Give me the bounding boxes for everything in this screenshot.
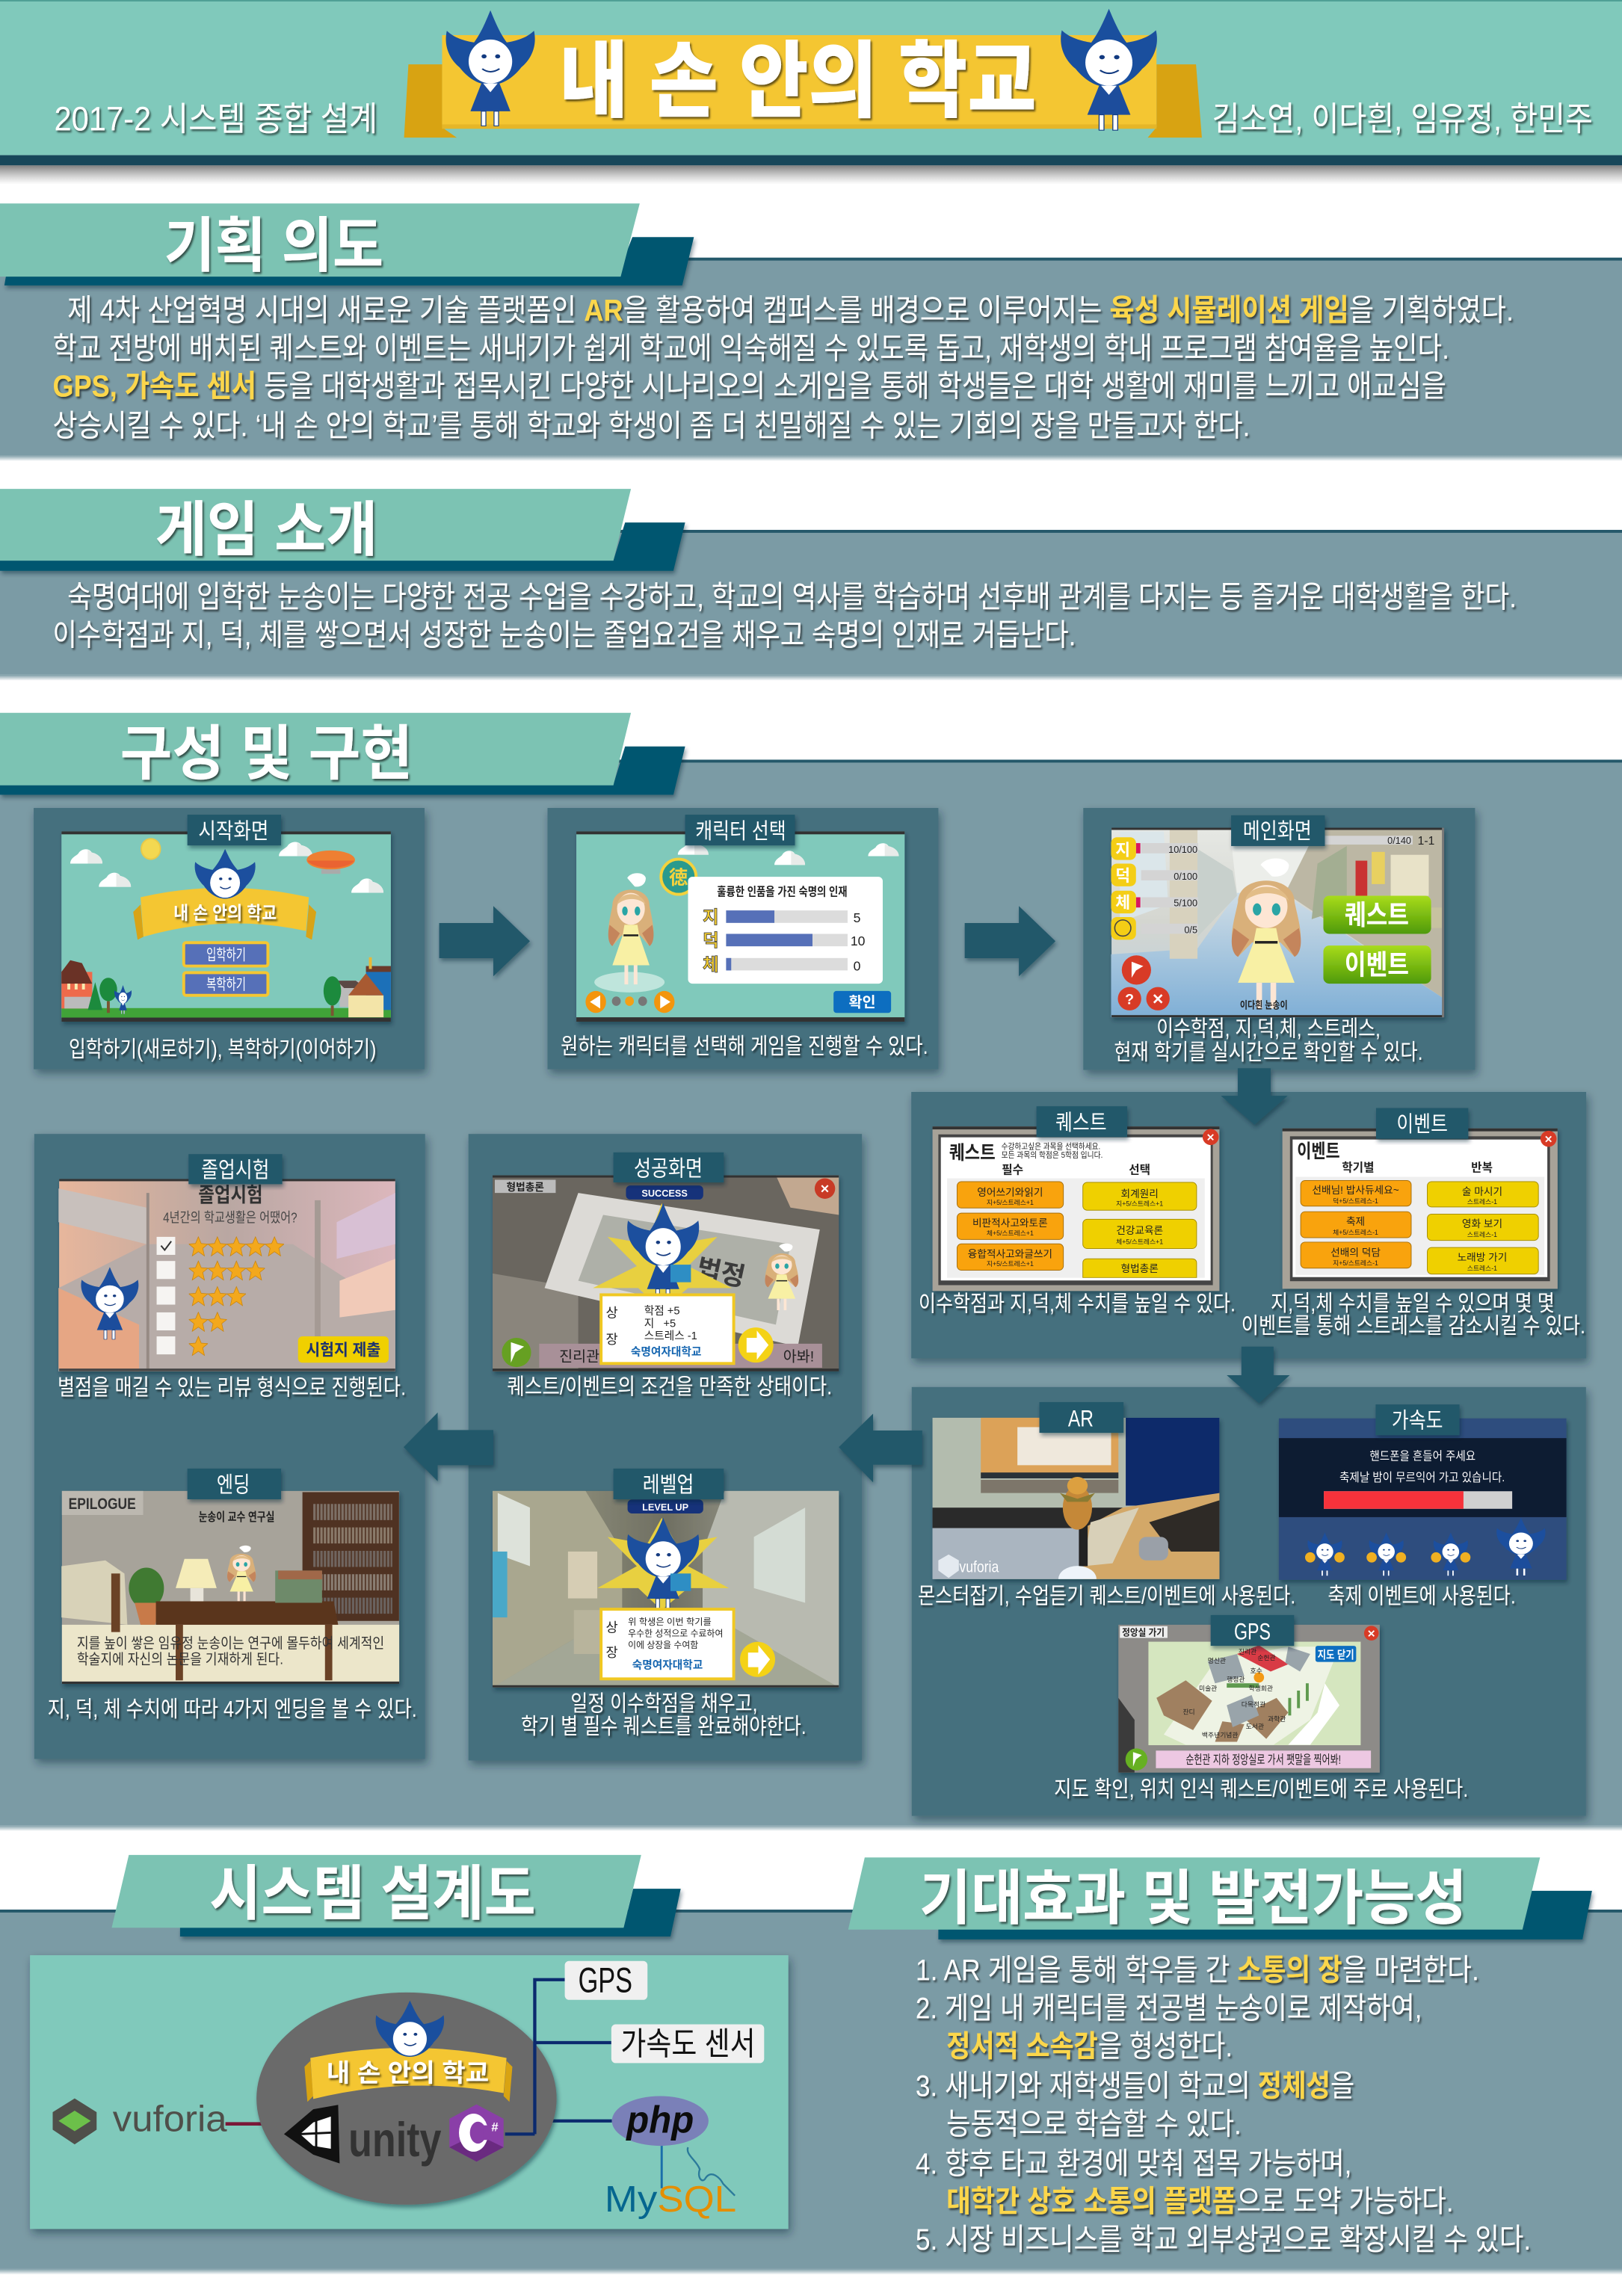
heading: game introduction: 게임 소개: [155, 481, 377, 568]
caption: main screen: 현재 학기를 실시간으로 확인할 수 있다.: [1114, 1040, 1423, 1065]
screenshot: main screen: 덕: [1115, 867, 1130, 885]
screenshot: event: 노래방 가기: [1458, 1252, 1507, 1263]
screenshot: quest: 영어쓰기와읽기: [977, 1187, 1043, 1198]
screenshot: ending: 눈송이 교수 연구실: [199, 1510, 274, 1524]
list: expected effects: [916, 1954, 1531, 2256]
screenshot: success: 장: [606, 1332, 618, 1347]
screenshot: character select: 0: [854, 958, 861, 973]
screenshot: event: ✕: [1544, 1134, 1552, 1145]
screenshot: success: ✕: [820, 1183, 830, 1196]
heading: composition and implementation: [0, 706, 685, 794]
caption: ending: 지, 덕, 체 수치에 따라 4가지 엔딩을 볼 수 있다.: [48, 1697, 417, 1722]
list: expected effects: 2. 게임 내 캐릭터를 전공별 눈송이로 제작하여,: [916, 1992, 1422, 2025]
screenshot: acceleration: [1279, 1419, 1567, 1580]
screenshot: GPS map: 지도 닫기: [1318, 1649, 1354, 1661]
label: GPS: [1211, 1615, 1294, 1646]
label: AR: AR: [1068, 1405, 1094, 1431]
screenshot: main screen: 퀘스트: [1345, 892, 1409, 933]
label: acceleration: [1375, 1404, 1460, 1435]
heading: planning intent: [0, 197, 694, 286]
screenshot: success: [493, 1176, 839, 1371]
screenshot: main screen: 5/100: [1174, 897, 1197, 908]
card: graduation and ending: [34, 1134, 425, 1759]
screenshot: start screen: 내 손 안의 학교: [173, 899, 277, 925]
screenshot: character select: 확인: [849, 994, 876, 1010]
panel: game introduction: [0, 530, 1622, 681]
screenshot: success: 진리관: [559, 1348, 599, 1365]
label: main screen: 메인화면: [1243, 819, 1312, 844]
caption: quest: 이수학점과 지,덕,체 수치를 높일 수 있다.: [919, 1292, 1236, 1317]
screenshot: event: 이벤트: [1297, 1136, 1340, 1164]
card: start screen: [34, 808, 425, 1070]
intent text: GPS, 가속도 센서 등을 대학생활과 접목시킨 다양한 시나리오의 소게임을 통해 학생들은 대학 생활에 재미를 느끼고 애교심을: [53, 369, 1446, 404]
screenshot: level up: [493, 1491, 839, 1688]
panel: system design and outlook: [0, 1910, 1622, 2274]
caption: main screen: 이수학점, 지,덕,체, 스트레스,: [1156, 1016, 1381, 1042]
screenshot: success: 상: [606, 1306, 618, 1321]
screenshot: AR: [933, 1418, 1219, 1579]
logo: C#: [449, 2105, 504, 2161]
screenshot: ending: 학술지에 자신의 논문을 기재하게 된다.: [77, 1652, 283, 1668]
logo: vuforia: vuforia: [113, 2099, 227, 2139]
connector lines: [226, 1980, 662, 2188]
logo: unity: [284, 2105, 442, 2167]
screenshot: level up: 위 학생은 이번 학기를: [628, 1617, 712, 1627]
logo: vuforia: [53, 2099, 227, 2144]
screenshot: level up: LEVEL UP: [642, 1502, 689, 1513]
screenshot: ending: [61, 1491, 399, 1684]
chart: system diagram: [30, 1955, 789, 2229]
caption: acceleration: 축제 이벤트에 사용된다.: [1327, 1584, 1516, 1608]
icon: mascot left: [446, 10, 535, 126]
screenshot: GPS map: 순헌관 지하 정앙실로 가서 팻말을 찍어봐!: [1185, 1753, 1341, 1767]
screenshot: character select: 체: [703, 954, 719, 974]
caption: success: 퀘스트/이벤트의 조건을 만족한 상태이다.: [507, 1374, 832, 1399]
intent text: 상승시킬 수 있다. ‘내 손 안의 학교’를 통해 학교와 학생이 좀 더 친밀해질 수 있는 기회의 장을 만들고자 한다.: [53, 409, 1251, 443]
screenshot: event: 지+5/스트레스-1: [1333, 1259, 1378, 1267]
screenshot: event: [1283, 1129, 1558, 1289]
arrow: sensors to success: [839, 1413, 922, 1482]
screenshot: AR: vuforia: [959, 1558, 999, 1576]
heading: system design: 시스템 설계도: [209, 1846, 536, 1933]
screenshot: main screen: 10/100: [1168, 844, 1197, 855]
screenshot: event: 선배님! 밥사듀세요~: [1312, 1185, 1399, 1196]
screenshot: main screen: 이벤트: [1345, 942, 1409, 982]
screenshot: acceleration: 축제날 밤이 무르익어 가고 있습니다.: [1339, 1471, 1505, 1484]
card: main screen: [1083, 808, 1475, 1070]
heading: game introduction: [0, 481, 685, 571]
list: expected effects: 3. 새내기와 재학생들이 학교의 정체성을: [916, 2069, 1354, 2102]
screenshot: quest: 필수: [1002, 1164, 1023, 1177]
screenshot: GPS map: 정앙실 가기: [1122, 1627, 1165, 1638]
caption: start screen: 입학하기(새로하기), 복학하기(이어하기): [69, 1037, 376, 1062]
screenshot: character select: 徳: [669, 862, 688, 890]
screenshot: character select: 5: [854, 910, 861, 925]
screenshot: GPS map: 진리관: [1239, 1648, 1256, 1655]
caption: graduation exam: 별점을 매길 수 있는 리뷰 형식으로 진행된다.: [58, 1375, 406, 1400]
arrow: quest and event to sensors: [1227, 1347, 1289, 1404]
screenshot: GPS map: [1118, 1625, 1380, 1773]
screenshot: GPS map: 다목적관: [1242, 1700, 1265, 1709]
screenshot: ending: EPILOGUE: [69, 1495, 136, 1513]
icon: mascot right: [1061, 9, 1157, 130]
screenshot: start screen: 입학하기: [206, 947, 246, 964]
screenshot: quest: 수강하고싶은 과목을 선택하세요.: [1002, 1141, 1100, 1151]
title banner: [404, 14, 1202, 138]
screenshot: success: 법정: [694, 1253, 747, 1292]
card: sensors: [912, 1387, 1586, 1816]
label: AR: [1040, 1402, 1123, 1433]
screenshot: quest: 융합적사고와글쓰기: [968, 1248, 1052, 1259]
screenshot: success: SUCCESS: [641, 1188, 688, 1199]
logo: php: [612, 2096, 709, 2146]
screenshot: quest: 지+5/스트레스+1: [987, 1199, 1034, 1206]
card: character select: [547, 808, 938, 1070]
screenshot: event: 스트레스-1: [1467, 1198, 1497, 1206]
screenshot: character select: [576, 831, 904, 1022]
screenshot: event: 체+5/스트레스-1: [1333, 1229, 1378, 1236]
node: GPS: GPS: [579, 1960, 632, 1999]
screenshot: level up: 장: [606, 1645, 618, 1660]
screenshot: event: 축제: [1346, 1216, 1365, 1227]
screenshot: main screen: 체: [1115, 894, 1130, 912]
screenshot: quest: 체+5/스트레스+1: [987, 1229, 1034, 1237]
label: start screen: [188, 815, 281, 845]
heading: planning intent: 기획 의도: [164, 197, 383, 284]
caption: GPS: 지도 확인, 위치 인식 퀘스트/이벤트에 주로 사용된다.: [1054, 1777, 1468, 1802]
screenshot: event: 영화 보기: [1462, 1218, 1502, 1229]
screenshot: GPS map: 과학관: [1268, 1715, 1286, 1723]
screenshot: main screen: 지: [1115, 842, 1130, 860]
screenshot: success: 형법총론: [507, 1182, 544, 1193]
tech stack ellipse: 내 손 안의 학교: [327, 2052, 489, 2089]
screenshot: quest: 비판적사고와토론: [972, 1218, 1048, 1229]
header band: [0, 0, 1622, 185]
label: success: 성공화면: [634, 1157, 703, 1182]
screenshot: event: 술 마시기: [1462, 1186, 1502, 1197]
screenshot: start screen: 복학하기: [206, 976, 246, 993]
screenshot: GPS map: 미술관: [1199, 1685, 1217, 1692]
label: main screen: [1231, 815, 1325, 846]
logo: MySQL: MySQL: [605, 2179, 736, 2220]
screenshot: level up: 우수한 성적으로 수료하여: [628, 1629, 723, 1639]
screenshot: GPS map: ✕: [1367, 1629, 1375, 1640]
label: level up: 레벨업: [643, 1473, 694, 1498]
screenshot: GPS map: 명신관: [1208, 1657, 1226, 1664]
screenshot: success: 지 +5: [644, 1317, 676, 1330]
arrow: start to character: [440, 906, 530, 976]
screenshot: quest: [933, 1126, 1219, 1291]
screenshot: quest: 지+5/스트레스+1: [1116, 1200, 1163, 1208]
screenshot: character select: 10: [851, 933, 866, 948]
label: GPS: GPS: [1234, 1618, 1271, 1644]
list: expected effects: 1. AR 게임을 통해 학우들 간 소통의 장을 마련한다.: [916, 1954, 1479, 1987]
list: expected effects: 5. 시장 비즈니스를 학교 외부상권으로 확장시킬 수 있다.: [916, 2223, 1531, 2256]
label: quest: 퀘스트: [1055, 1111, 1107, 1135]
screenshot: character select: 지: [703, 907, 719, 927]
screenshot: quest: 퀘스트: [949, 1138, 996, 1165]
label: character select: [685, 815, 795, 845]
panel: composition and implementation: [0, 759, 1622, 1831]
screenshot: level up: 상: [606, 1620, 618, 1635]
logo: C#: #: [491, 2120, 499, 2134]
intro text: 이수학점과 지, 덕, 체를 쌓으면서 성장한 눈송이는 졸업요건을 채우고 숙명의 인재로 거듭난다.: [53, 618, 1076, 652]
caption: AR: 몬스터잡기, 수업듣기 퀘스트/이벤트에 사용된다.: [918, 1584, 1295, 1608]
screenshot: GPS map: 행정관: [1227, 1675, 1245, 1683]
screenshot: success: 스트레스 -1: [644, 1330, 697, 1342]
screenshot: GPS map: 도서관: [1246, 1723, 1264, 1730]
label: start screen: 시작화면: [198, 819, 268, 844]
intent text: [53, 293, 1514, 443]
screenshot: event: 덕+5/스트레스-1: [1333, 1197, 1378, 1205]
card: success and level up: [469, 1134, 862, 1760]
screenshot: character select: 덕: [703, 931, 719, 950]
heading: composition and implementation: 구성 및 구현: [120, 706, 413, 792]
arrow: main to quest and event: [1221, 1068, 1288, 1125]
caption: main screen: [1114, 1016, 1423, 1065]
screenshot: event: 스트레스-1: [1467, 1265, 1497, 1272]
caption: event: [1242, 1292, 1585, 1339]
caption: level up: 일정 이수학점을 채우고,: [570, 1691, 758, 1716]
list: expected effects: 4. 향후 타교 환경에 맞춰 접목 가능하며,: [916, 2147, 1351, 2180]
screenshot: main screen: 0/140: [1387, 835, 1411, 846]
screenshot: quest: 체+5/스트레스+1: [1116, 1238, 1163, 1246]
title text: 내 손 안의 학교: [559, 14, 1037, 135]
label: event: [1376, 1108, 1468, 1139]
label: ending: [188, 1469, 281, 1499]
screenshot: level up: 숙명여자대학교: [632, 1659, 703, 1672]
screenshot: main screen: ✕: [1152, 991, 1164, 1007]
screenshot: GPS map: 순헌관: [1257, 1654, 1276, 1661]
caption: event: 지,덕,체 수치를 높일 수 있으며 몇 몇: [1271, 1292, 1555, 1316]
screenshot: quest: 지+5/스트레스+1: [987, 1260, 1034, 1268]
screenshot: quest: 건강교육론: [1116, 1225, 1163, 1236]
screenshot: event: 스트레스-1: [1467, 1231, 1497, 1238]
screenshot: quest: 선택: [1129, 1164, 1150, 1177]
tech stack ellipse: [256, 1993, 557, 2205]
node: acceleration sensor: 가속도 센서: [620, 2027, 756, 2063]
screenshot: ending: 지를 높이 쌓은 임유정 눈송이는 연구에 몰두하여 세계적인: [77, 1635, 384, 1652]
screenshot: graduation exam: 졸업시험: [198, 1183, 263, 1206]
label: acceleration: 가속도: [1392, 1408, 1443, 1433]
screenshot: quest: ✕: [1206, 1132, 1215, 1144]
screenshot: acceleration: 핸드폰을 흔들어 주세요: [1369, 1450, 1475, 1463]
intro text: [53, 580, 1517, 652]
screenshot: success: 아봐!: [783, 1348, 814, 1365]
heading: expected effects: 기대효과 및 발전가능성: [919, 1851, 1467, 1937]
label: success: [614, 1152, 724, 1182]
heading: system design: [111, 1846, 681, 1937]
label: event: 이벤트: [1396, 1112, 1448, 1137]
screenshot: character select: 훌륭한 인품을 가진 숙명의 인재: [717, 886, 848, 899]
logo: unity: unity: [348, 2113, 442, 2167]
caption: level up: [521, 1691, 807, 1739]
label: character select: 캐릭터 선택: [695, 819, 786, 844]
caption: character select: 원하는 캐릭터를 선택해 게임을 진행할 수 있다.: [561, 1034, 928, 1059]
caption: level up: 학기 별 필수 퀘스트를 완료해야한다.: [521, 1714, 807, 1739]
logo: MySQL: [605, 2147, 736, 2220]
screenshot: quest: 모든 과목의 학점은 5학점 입니다.: [1002, 1150, 1103, 1160]
screenshot: start screen: [61, 831, 391, 1022]
screenshot: GPS map: 잔디: [1182, 1708, 1195, 1715]
header left text: course name: 2017-2 시스템 종합 설계: [54, 99, 377, 138]
screenshot: main screen: [1111, 827, 1444, 1017]
label: graduation exam: 졸업시험: [201, 1158, 269, 1183]
list: expected effects: 능동적으로 학습할 수 있다.: [946, 2107, 1242, 2141]
screenshot: level up: 이에 상장을 수여함: [628, 1641, 698, 1650]
panel: planning intent: [0, 258, 1622, 461]
intent text: 제 4차 산업혁명 시대의 새로운 기술 플랫폼인 AR을 활용하여 캠퍼스를 배경으로 이루어지는 육성 시뮬레이션 게임을 기획하였다.: [67, 293, 1514, 327]
screenshot: GPS map: 백주년기념관: [1202, 1732, 1238, 1739]
screenshot: main screen: 1-1: [1418, 835, 1434, 848]
screenshot: quest: 회계원리: [1120, 1188, 1159, 1200]
screenshot: success: 숙명여자대학교: [631, 1346, 701, 1359]
card: quest and event: [911, 1092, 1586, 1358]
label: ending: 엔딩: [217, 1473, 250, 1498]
screenshot: main screen: 0/5: [1184, 925, 1197, 936]
screenshot: graduation exam: 4년간의 학교생활은 어땠어?: [163, 1209, 297, 1225]
arrow: character to main: [965, 906, 1055, 976]
screenshot: main screen: 0/100: [1174, 871, 1197, 882]
screenshot: event: 학기별: [1342, 1161, 1374, 1175]
screenshot: graduation exam: [58, 1179, 395, 1371]
arrow: success to graduation: [404, 1413, 493, 1481]
screenshot: success: 학점 +5: [644, 1305, 680, 1318]
screenshot: main screen: 이다흰 눈송이: [1240, 999, 1288, 1010]
screenshot: event: 반복: [1471, 1161, 1493, 1175]
list: expected effects: 대학간 상호 소통의 플랫폼으로 도약 가능하다.: [946, 2185, 1454, 2218]
screenshot: main screen: ?: [1125, 991, 1134, 1007]
screenshot: graduation exam: 시험지 제출: [306, 1342, 380, 1360]
screenshot: event: 선배의 덕담: [1330, 1247, 1381, 1258]
logo: php: php: [625, 2098, 694, 2141]
label: level up: [614, 1469, 724, 1499]
screenshot: GPS map: 호수: [1251, 1667, 1262, 1674]
label: quest: [1037, 1106, 1127, 1137]
screenshot: quest: 형법총론: [1120, 1263, 1159, 1274]
screenshot: GPS map: 학생회관: [1249, 1685, 1273, 1692]
list: expected effects: 정서적 소속감을 형성한다.: [946, 2030, 1233, 2064]
